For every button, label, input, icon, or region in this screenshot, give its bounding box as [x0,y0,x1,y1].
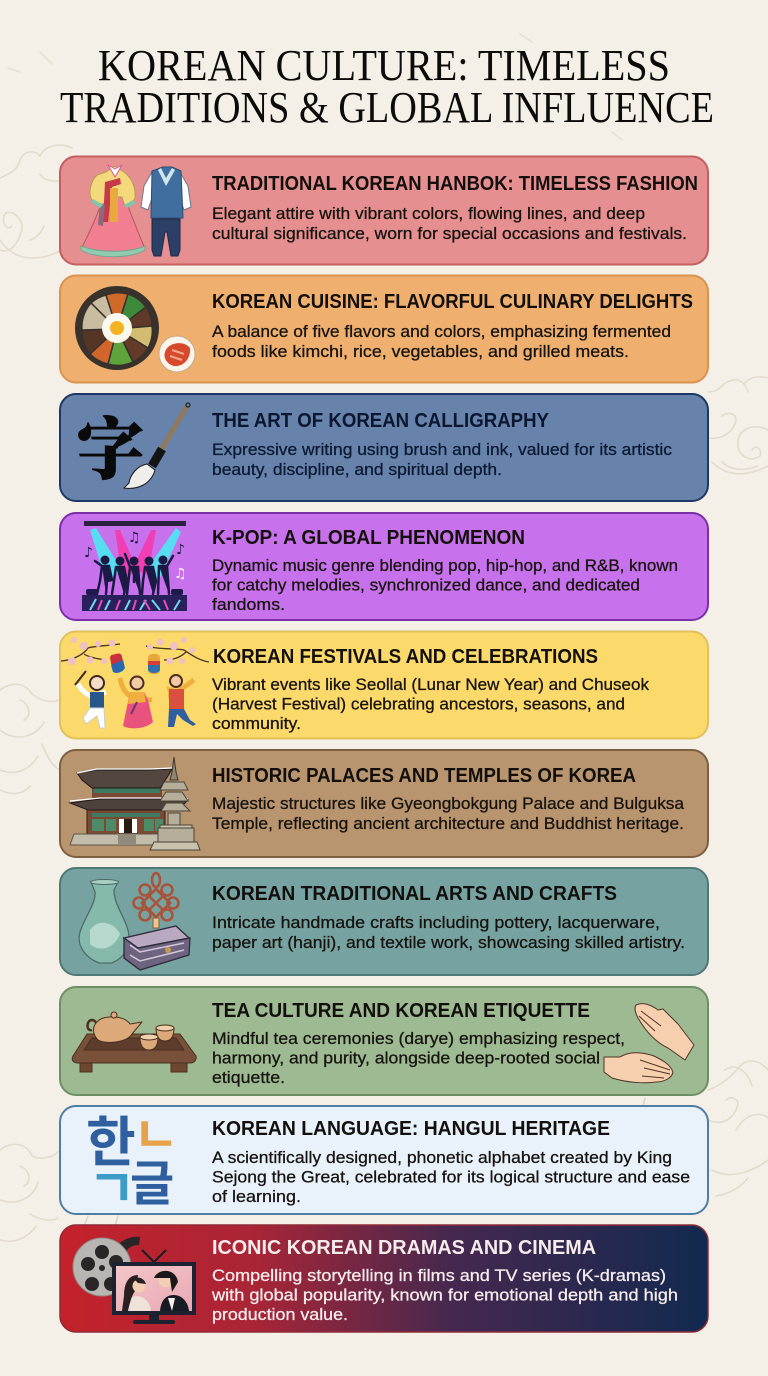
panel: k-pop [60,513,708,620]
text: cuisine: A balance of five flavors and colors, emphasizing fermented [212,323,671,341]
icon: hangul letters: 한 [86,1098,136,1177]
text: palaces: Temple, reflecting ancient architecture and Buddhist heritage. [212,815,684,833]
text: palaces: Majestic structures like Gyeongbokgung Palace and Bulguksa [212,795,685,813]
text: hangul: A scientifically designed, phonetic alphabet created by King [212,1149,672,1167]
text: hanbok: Elegant attire with vibrant colors, flowing lines, and deep [212,205,645,223]
panel: hanbok [60,156,708,264]
heading: palaces: HISTORIC PALACES AND TEMPLES OF KOREA [212,765,636,787]
icon: palace and pagoda [70,757,200,850]
icon: concert stage: ♫ [128,530,141,546]
text: dramas and cinema: Compelling storytelling in films and TV series (K-dramas) [212,1267,666,1285]
panel: hangul [60,1096,708,1222]
text: arts and crafts: paper art (hanji), and textile work, showcasing skilled artistry. [212,934,685,952]
heading: festivals: KOREAN FESTIVALS AND CELEBRATIONS [213,646,598,668]
heading: calligraphy: THE ART OF KOREAN CALLIGRAPHY [212,410,550,432]
text: cuisine [212,323,671,361]
icon: hangul letters: 글 [130,1144,174,1214]
panel: dramas and cinema [60,1225,708,1332]
title [60,41,714,132]
heading: tea culture: TEA CULTURE AND KOREAN ETIQUETTE [212,1000,590,1022]
icon: brush and character: 字 [77,397,144,493]
text: k-pop [212,557,678,614]
text: tea culture [212,1030,625,1087]
text: hanbok [212,205,687,243]
heading: hanbok: TRADITIONAL KOREAN HANBOK: TIMELESS FASHION [212,173,698,195]
text: tea culture: Mindful tea ceremonies (darye) emphasizing respect, [212,1030,625,1048]
text: cuisine: foods like kimchi, rice, vegetables, and grilled meats. [212,343,629,361]
icon: concert stage: ♫ [174,566,187,582]
text: calligraphy: Expressive writing using brush and ink, valued for its artistic [212,441,672,459]
panel: tea culture [60,987,708,1095]
text: festivals: Vibrant events like Seollal (Lunar New Year) and Chuseok [212,676,650,694]
icon: dancers, lanterns and blossoms [61,637,209,728]
text: hangul: Sejong the Great, celebrated for its logical structure and ease [212,1168,690,1186]
icon: vase, knot and box [79,873,190,970]
text: k-pop: for catchy melodies, synchronized dance, and dedicated [212,576,640,594]
heading: hangul: KOREAN LANGUAGE: HANGUL HERITAGE [212,1118,610,1140]
icon: film reel and tv [73,1237,196,1324]
text: arts and crafts: Intricate handmade crafts including pottery, lacquerware, [212,914,660,932]
text: festivals: community. [212,715,301,733]
icon: brush and character [77,397,190,493]
text: k-pop: fandoms. [212,596,285,614]
text: calligraphy [212,441,672,479]
text: festivals [212,676,650,733]
icon: concert stage: ♪ [176,542,185,558]
icon: concert stage: ♪ [84,545,93,561]
text: dramas and cinema: with global popularity, known for emotional depth and high [211,1286,678,1304]
heading: dramas and cinema: ICONIC KOREAN DRAMAS AND CINEMA [212,1237,596,1259]
text: palaces [212,795,685,833]
icon: hangul letters: ㄴ [133,1096,179,1168]
icon: tea set on table [72,1012,196,1072]
panel: arts and crafts [60,868,708,975]
text: arts and crafts [212,914,685,952]
heading: k-pop: K-POP: A GLOBAL PHENOMENON [212,527,525,549]
icon: hanbok pair [81,165,191,257]
icon: hangul letters [86,1096,179,1222]
text: calligraphy: beauty, discipline, and spiritual depth. [212,461,502,479]
title: KOREAN CULTURE: TIMELESS [98,41,670,90]
text: hangul: of learning. [212,1188,301,1206]
panel: palaces [60,750,708,857]
text: tea culture: harmony, and purity, alongside deep-rooted social [212,1050,600,1068]
text: dramas and cinema [211,1267,678,1324]
icon: concert stage [82,521,187,611]
text: k-pop: Dynamic music genre blending pop, hip-hop, and R&B, known [212,557,678,575]
heading: arts and crafts: KOREAN TRADITIONAL ARTS AND CRAFTS [212,883,617,905]
text: dramas and cinema: production value. [212,1306,348,1324]
text: tea culture: etiquette. [212,1069,285,1087]
icon: bowing hands [604,1004,694,1083]
text: hanbok: cultural significance, worn for special occasions and festivals. [212,225,687,243]
panel: cuisine [60,276,708,382]
panel: festivals [60,632,708,738]
icon: bibimbap and kimchi [75,286,195,372]
heading: cuisine: KOREAN CUISINE: FLAVORFUL CULINARY DELIGHTS [212,291,693,313]
text: festivals: (Harvest Festival) celebrating ancestors, seasons, and [212,696,625,714]
text: hangul [212,1149,690,1206]
icon: hangul letters: ㄱ [88,1147,136,1222]
panel: calligraphy [60,394,708,501]
